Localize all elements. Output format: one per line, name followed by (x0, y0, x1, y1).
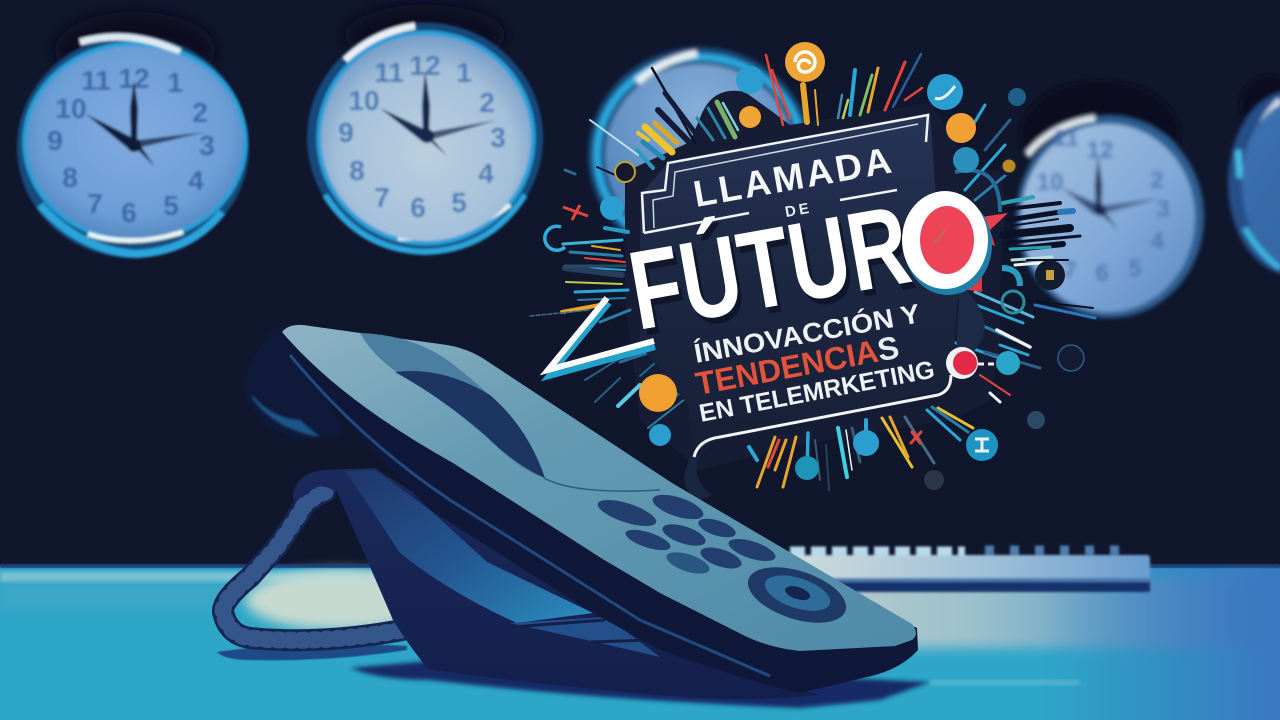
clock 2: 4 (478, 158, 494, 189)
clock 2: 7 (374, 182, 390, 213)
icon: blue check (927, 74, 963, 110)
earpiece recess lip (360, 333, 544, 478)
clock 1: 4 (188, 165, 204, 196)
clock 4: 3 (1156, 196, 1170, 223)
table gap dark wedge (430, 510, 497, 562)
lower-left fan (585, 310, 692, 428)
plaque white outline bottom (694, 375, 951, 457)
icon: right dark badges (1002, 260, 1065, 313)
clock 2: 3 (490, 122, 506, 153)
plaque inner outline (653, 124, 918, 228)
icon: blue bulb (736, 66, 764, 94)
clock 2: 11 (374, 57, 404, 88)
clock 4: 11 (1053, 125, 1079, 152)
text: Tendencias: TENDENCIAS (693, 329, 902, 402)
icon: orange circle right (946, 113, 976, 143)
base dark body (293, 468, 820, 699)
nav wheel (741, 556, 853, 634)
clock 1 (17, 12, 249, 258)
clock 4: 12 (1087, 137, 1113, 164)
telephone (244, 324, 918, 699)
recess inner shade (395, 371, 545, 478)
base slots (510, 617, 660, 657)
clock 2: 12 (409, 50, 441, 81)
icon: gold badge left (615, 162, 635, 182)
coiled cord (223, 492, 402, 640)
clock 2: 1 (456, 57, 472, 88)
recess rim (544, 478, 660, 491)
icon: cyan ring (545, 226, 565, 250)
icon: orange dot (739, 106, 761, 128)
button (696, 514, 738, 542)
clock 2: 8 (349, 155, 365, 186)
clock 1: 9 (47, 125, 63, 156)
clock 1: 1 (167, 67, 183, 98)
icon: outlined ring (1058, 345, 1084, 371)
base crescent (345, 470, 593, 623)
button (623, 525, 673, 555)
button (663, 547, 713, 579)
clock 4: 4 (1150, 228, 1164, 255)
icon: dark badge top right (1008, 88, 1026, 106)
clock 1: 8 (62, 162, 78, 193)
keyboard (790, 550, 1150, 592)
icon: small dark badge (1027, 411, 1045, 429)
icon: blue badge bottom (853, 430, 879, 456)
clock 2: 2 (479, 87, 495, 118)
icon: orange ball (639, 374, 677, 412)
clock 1: 2 (192, 97, 208, 128)
icon: teal node (996, 351, 1020, 375)
left fan (530, 170, 628, 316)
clock 1: 11 (81, 65, 111, 96)
icon: blue tool (966, 429, 998, 461)
clock 1: 7 (87, 188, 103, 219)
table surface (0, 564, 1280, 720)
text: Innovacion y: ÍNNOVACCIÓN Y (692, 297, 922, 369)
clock 2: 5 (451, 187, 467, 218)
plaque right curl (955, 285, 985, 372)
icon: blue shield (649, 424, 671, 446)
clock 4: 7 (1063, 257, 1077, 284)
plaque white outline top (642, 115, 928, 233)
red letter O (902, 191, 992, 295)
clock 1: 5 (163, 190, 179, 221)
icon: small gold badge (1001, 158, 1017, 174)
clock 4 (1016, 80, 1204, 318)
earpiece highlight (252, 395, 320, 437)
text: En telemarketing: EN TELEMRKETING (697, 356, 937, 428)
clock 2: 9 (338, 117, 354, 148)
clock 3 (588, 47, 812, 263)
clock 1: 10 (55, 93, 87, 124)
emblem (530, 42, 1095, 500)
red lower ribbon (955, 262, 982, 292)
clock 4: 6 (1095, 260, 1109, 287)
DE rule lines (644, 190, 897, 233)
icon: blue circle left (600, 196, 624, 220)
button (594, 494, 660, 532)
right fan (956, 105, 1095, 402)
icon: teal badge bottom (795, 456, 819, 480)
bottom fan (749, 407, 973, 490)
clock 4: 2 (1150, 167, 1164, 194)
heading: FUTURO: FÚTURO (620, 171, 982, 354)
clock 1: 3 (199, 130, 215, 161)
plaque dark curls (684, 455, 712, 500)
clock 5 (1228, 75, 1280, 275)
clock 1: 12 (118, 63, 150, 94)
button (725, 534, 779, 566)
plaque (640, 113, 985, 500)
clock 1: 6 (121, 197, 137, 228)
red flag ribbon (972, 213, 1008, 246)
white chevron arrow (548, 298, 655, 376)
handset rim (276, 324, 918, 693)
burst lines (530, 54, 1095, 490)
heading: FUTURO shadow: FÚTURO (624, 177, 986, 360)
blue arc behind plaque (955, 170, 1000, 212)
clock 4: 10 (1037, 169, 1063, 196)
clock 2 (307, 5, 543, 253)
button (649, 489, 707, 525)
button (659, 519, 709, 551)
clock 4: 5 (1128, 255, 1142, 282)
icon: red target (946, 347, 1000, 379)
dark collar behind plaque (625, 91, 1005, 470)
earpiece back (244, 326, 345, 439)
top fan (590, 54, 922, 175)
clock 2: 10 (348, 85, 380, 116)
rim blue highlight (290, 355, 770, 676)
heading: LLAMADA: LLAMADA (690, 140, 894, 215)
button (697, 543, 745, 573)
base slot lines (512, 620, 650, 642)
icon: red cross (563, 205, 588, 220)
heading: DE: DE (784, 200, 810, 221)
icon: blue leaf (953, 147, 979, 173)
table gap pale wedge (487, 560, 593, 613)
icon: orange swirl (785, 42, 825, 82)
clock 2: 6 (410, 192, 426, 223)
icon: dark badge bottom (924, 470, 944, 490)
handset face (282, 325, 916, 651)
